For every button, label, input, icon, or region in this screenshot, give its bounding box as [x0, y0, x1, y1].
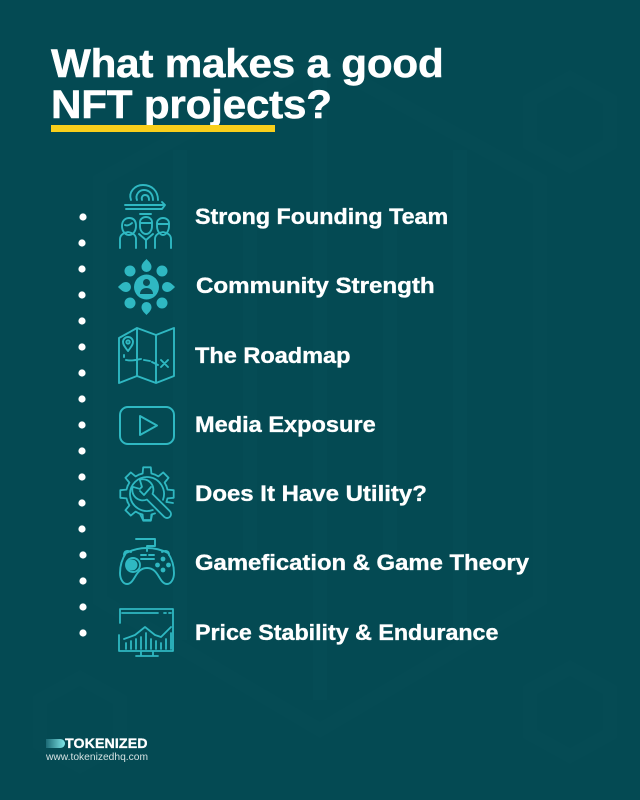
- icon: founding team: [119, 184, 172, 249]
- website url: www.tokenizedhq.com: [46, 752, 148, 763]
- title: [50, 42, 444, 127]
- icon: map: [118, 327, 175, 384]
- heading: Gamefication & Game Theory: Gamefication & Game Theory: [195, 550, 529, 575]
- heading: Strong Founding Team: Strong Founding Team: [195, 204, 448, 229]
- icon: price chart monitor: [118, 608, 174, 657]
- icon: gear and wrench: [119, 466, 175, 522]
- icon: community: [118, 259, 175, 315]
- heading: Community Strength: Community Strength: [196, 273, 435, 298]
- title: NFT projects?: [51, 83, 332, 127]
- icon: play button: [119, 406, 175, 445]
- heading: Price Stability & Endurance: Price Stability & Endurance: [195, 620, 498, 645]
- icon: game controller: [119, 538, 175, 585]
- heading: Does It Have Utility?: Does It Have Utility?: [195, 481, 427, 506]
- logo: Tokenized: [46, 736, 148, 763]
- title underline: [51, 125, 275, 132]
- title: What makes a good: [51, 42, 444, 86]
- logo wordmark: TOKENIZED: [65, 736, 148, 751]
- heading: The Roadmap: The Roadmap: [195, 343, 351, 368]
- logo mark: [46, 739, 65, 748]
- heading: Media Exposure: Media Exposure: [195, 412, 376, 437]
- dotted timeline: [78, 213, 87, 637]
